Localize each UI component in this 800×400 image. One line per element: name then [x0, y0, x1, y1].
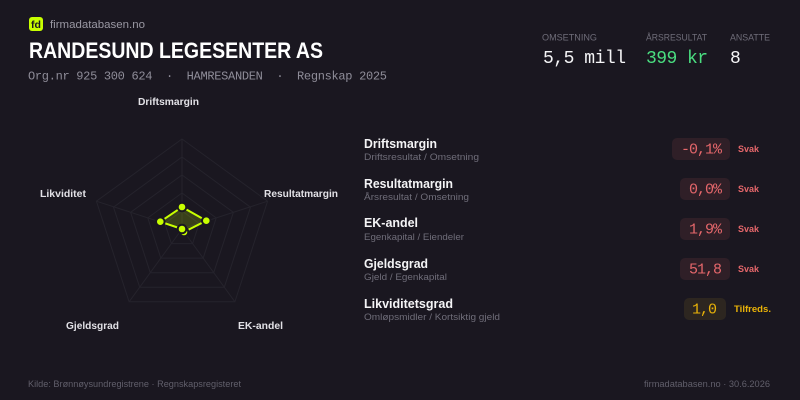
metric row: likviditetsgrad: Tilfreds. — [734, 304, 771, 314]
radar axis labels: EK-andel — [238, 321, 283, 332]
kpi: omsetning: 5,5 mill — [543, 49, 626, 69]
radar axis labels: Likviditet — [40, 189, 87, 200]
metric row: likviditetsgrad: Omløpsmidler / Kortsiktig gjeld — [364, 312, 500, 323]
metric row: ek-andel: Egenkapital / Eiendeler — [364, 232, 464, 243]
icon: firmadatabasen logo — [29, 17, 43, 31]
metric row: gjeldsgrad: Gjeld / Egenkapital — [364, 272, 447, 283]
kpi: årsresultat: 399 kr — [646, 49, 708, 69]
metric list — [364, 136, 771, 323]
metric row: driftsmargin: -0,1% — [681, 142, 723, 158]
metric row: gjeldsgrad: Gjeldsgrad — [364, 256, 428, 271]
kpi: årsresultat — [646, 32, 708, 69]
radar grid — [96, 139, 268, 302]
metric row: resultatmargin: 0,0% — [689, 182, 723, 198]
radar chart — [40, 97, 338, 332]
radar axis labels: Driftsmargin — [138, 97, 199, 108]
metric row: resultatmargin: Resultatmargin — [364, 176, 453, 191]
metric row: likviditetsgrad: Likviditetsgrad — [364, 296, 453, 311]
header: brand, title and org line — [28, 17, 387, 84]
metric row: driftsmargin: Svak — [738, 144, 760, 154]
metric row: resultatmargin — [364, 176, 760, 203]
metric row: ek-andel: Svak — [738, 224, 760, 234]
metric row: gjeldsgrad: 51,8 — [689, 262, 722, 278]
kpi: ansatte: 8 — [730, 49, 741, 69]
kpi: ansatte — [730, 32, 770, 69]
footer source: Kilde: Brønnøysundregistrene · Regnskapsregisteret — [28, 379, 241, 389]
kpi: ansatte: ANSATTE — [730, 32, 770, 42]
org line: Org.nr 925 300 624 · HAMRESANDEN · Regnskap 2025 — [28, 70, 387, 84]
title: RANDESUND LEGESENTER AS — [29, 38, 323, 63]
metric row: driftsmargin — [364, 136, 760, 163]
metric row: driftsmargin: Driftsmargin — [364, 136, 437, 151]
metric row: ek-andel — [364, 215, 760, 243]
metric row: likviditetsgrad: 1,0 — [692, 302, 717, 318]
brand name: firmadatabasen.no — [50, 19, 145, 31]
radar axis labels: Gjeldsgrad — [66, 321, 119, 332]
key figures — [542, 32, 770, 69]
radar data polygon — [160, 207, 206, 232]
metric row: likviditetsgrad — [364, 296, 771, 323]
kpi: omsetning — [542, 32, 626, 69]
metric row: gjeldsgrad: Svak — [738, 264, 760, 274]
metric row: ek-andel: 1,9% — [689, 222, 723, 238]
kpi: omsetning: OMSETNING — [542, 32, 597, 42]
kpi: årsresultat: ÅRSRESULTAT — [646, 32, 707, 42]
metric row: driftsmargin: Driftsresultat / Omsetning — [364, 152, 479, 163]
metric row: resultatmargin: Svak — [738, 184, 760, 194]
radar axis labels — [40, 97, 338, 332]
metric row: resultatmargin: Årsresultat / Omsetning — [364, 192, 469, 203]
radar data points — [156, 203, 211, 236]
radar axis labels: Resultatmargin — [264, 189, 338, 200]
icon: firmadatabasen logo: fd — [31, 20, 41, 31]
footer site and date: firmadatabasen.no · 30.6.2026 — [644, 379, 770, 389]
metric row: ek-andel: EK-andel — [364, 215, 418, 230]
metric row: gjeldsgrad — [364, 256, 760, 283]
